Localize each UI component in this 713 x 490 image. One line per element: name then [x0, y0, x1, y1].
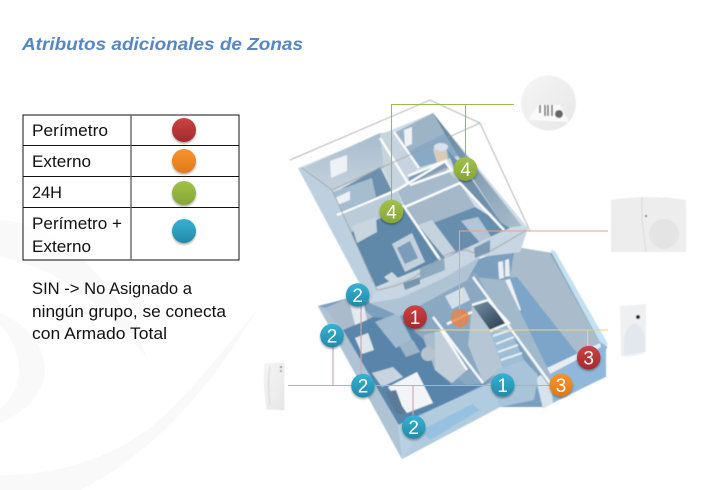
- right room outer edge: [550, 250, 608, 348]
- closet 2: [408, 162, 448, 184]
- bedroom floor: [327, 167, 393, 217]
- bedroom back wall: [305, 133, 384, 190]
- marker: red 1: 1: [410, 308, 420, 329]
- legend row: Perímetro + Externo: Perímetro +: [32, 215, 122, 233]
- marker: blue 2: [351, 374, 375, 398]
- legend row: Externo: [32, 149, 196, 173]
- marker: green 4: [454, 157, 477, 181]
- note text: [32, 280, 227, 343]
- roof wireframe: [290, 100, 530, 290]
- kids room wall: [337, 190, 403, 233]
- title: Atributos adicionales de Zonas: [21, 34, 303, 54]
- legend row: Perímetro: Perímetro: [32, 122, 108, 140]
- marker: orange 3: [550, 374, 572, 397]
- marker: blue 2: [320, 324, 344, 348]
- device: wall sensor box: [611, 197, 686, 252]
- right bedroom floor: [420, 207, 510, 260]
- connector lines: [288, 104, 608, 420]
- yellow connector: [415, 330, 608, 348]
- marker: orange 3: 3: [556, 376, 566, 397]
- right bedroom wall: [405, 183, 475, 228]
- stair well: [472, 300, 508, 330]
- left room floor: [343, 317, 482, 427]
- stairs: [490, 325, 524, 368]
- legend table: [23, 115, 239, 260]
- striped slab under upper floor: [370, 257, 480, 316]
- device: PIR camera sensor: [620, 304, 646, 356]
- central rooms: [402, 272, 490, 386]
- dividing wall: [473, 277, 553, 385]
- closet: [380, 132, 418, 192]
- green connector: [392, 104, 514, 200]
- bathroom wall: [394, 113, 447, 152]
- marker: green 4: 4: [460, 160, 471, 181]
- legend row: Perímetro + Externo: [32, 215, 196, 256]
- marker: red 3: [577, 346, 600, 370]
- note text: ningún grupo, se conecta: [32, 303, 227, 321]
- left room wall: [318, 306, 412, 459]
- marker: blue 2: [402, 415, 426, 439]
- right room floor: [507, 277, 577, 368]
- bathroom floor: [406, 132, 458, 168]
- device: left wall sensor: [264, 363, 284, 410]
- left translucent wall: [298, 167, 377, 303]
- legend row: 24H: 24H: [32, 184, 62, 202]
- orange connector: [460, 231, 608, 318]
- legend row: Perímetro + Externo: Externo: [32, 238, 91, 256]
- marker: red 1: [403, 305, 427, 329]
- marker: green 4: [380, 200, 403, 224]
- house illustration: [290, 100, 608, 459]
- note text: SIN -> No Asignado a: [32, 280, 193, 298]
- wall tops: [337, 132, 504, 260]
- marker: blue 1: [491, 373, 514, 397]
- marker: green 4: 4: [386, 202, 397, 224]
- legend row: 24H: [32, 181, 196, 205]
- device: smoke detector: [521, 76, 576, 130]
- marker: red 3: 3: [583, 349, 594, 370]
- marker: blue 2: 2: [408, 418, 419, 439]
- internal wall tops: [433, 277, 550, 383]
- right room wall: [510, 247, 600, 353]
- right room front sill: [536, 342, 606, 407]
- upper floor: [290, 100, 530, 316]
- marker: translucent orange: [451, 309, 469, 327]
- lower floor: [318, 247, 608, 459]
- marker: blue 2: [346, 283, 370, 307]
- kids room floor: [350, 207, 441, 287]
- upper floor slab: [298, 113, 528, 316]
- pink connector: [288, 295, 560, 420]
- marker: blue 2: 2: [358, 377, 368, 398]
- right interior wall: [433, 113, 522, 228]
- lower floor base: [318, 247, 607, 459]
- legend row: Perímetro: [32, 118, 196, 142]
- marker: blue 1: 1: [497, 376, 508, 397]
- rug and table: [372, 367, 403, 387]
- marker: blue 2: 2: [352, 286, 363, 307]
- hallway wall: [397, 168, 460, 207]
- note text: con Armado Total: [32, 325, 167, 343]
- sofa: [375, 313, 412, 348]
- translucent front wall: [398, 383, 500, 459]
- legend row: Externo: Externo: [32, 153, 91, 171]
- translucent front wall: [370, 228, 528, 316]
- marker: blue 2: 2: [327, 327, 337, 348]
- plant: [421, 347, 435, 361]
- background watermark swooshes: [0, 220, 257, 490]
